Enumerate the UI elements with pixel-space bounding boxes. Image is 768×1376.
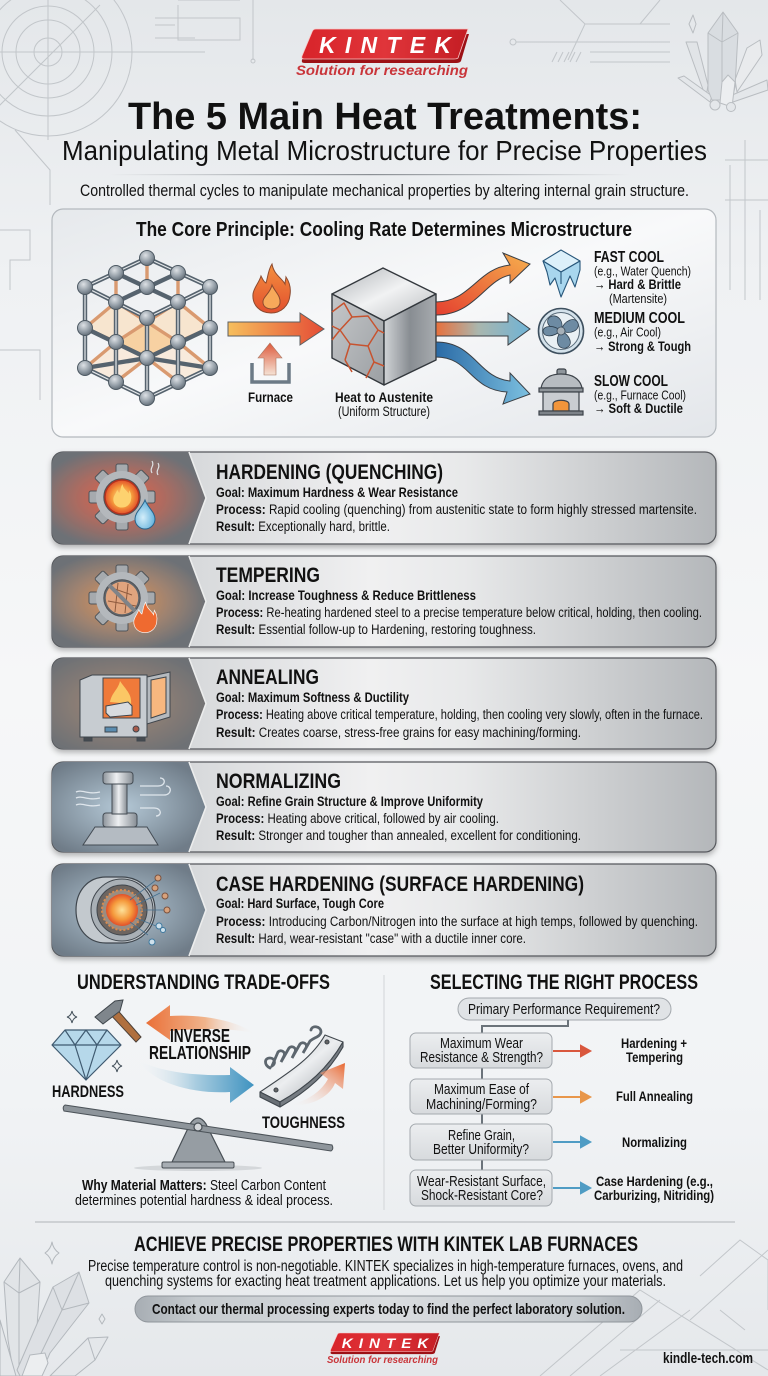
card text: Goal: Refine Grain Structure & Improve Uniformity [216, 794, 483, 809]
tagline: Controlled thermal cycles to manipulate mechanical properties by altering internal grain structure. [80, 182, 689, 200]
icon: gear with cracked grains and flame [89, 565, 157, 633]
card text: TEMPERING [216, 564, 320, 587]
section: selecting the right process [410, 971, 714, 1206]
panel: case hardening [52, 864, 716, 956]
icon: sparkles [67, 1011, 122, 1072]
label: fast cool: FAST COOL [594, 249, 664, 266]
arrow: orange inverse [146, 1005, 254, 1040]
card text: NORMALIZING [216, 770, 341, 793]
decoration: top right crystals [678, 12, 768, 112]
call to action pill: Contact our thermal processing experts today to find the perfect laboratory solution. [152, 1301, 625, 1318]
icon: spring [266, 1027, 321, 1068]
result 1: Hardening + [621, 1035, 687, 1051]
arrow: blue inverse [137, 1060, 254, 1103]
card text: Result: Hard, wear-resistant "case" with a ductile inner core. [216, 931, 526, 946]
arrow: decision 4 [553, 1183, 590, 1193]
logo tagline: Solution for researching [296, 63, 469, 78]
result 4: Case Hardening (e.g., [596, 1173, 713, 1189]
decision 1 [410, 1033, 552, 1068]
heading: trade-offs: UNDERSTANDING TRADE-OFFS [77, 971, 330, 994]
card text: Result: Essential follow-up to Hardening, restoring toughness. [216, 622, 536, 637]
icon: slow cool furnace [539, 369, 583, 415]
card text: Process: Heating above critical, followed by air cooling. [216, 811, 499, 826]
label: fast cool: → Hard & Brittle [594, 276, 681, 292]
label: fast cool [594, 249, 691, 306]
heated metal cube [332, 268, 436, 385]
icon: ice [543, 250, 580, 297]
card text [216, 873, 698, 946]
icon: diamond [52, 1030, 121, 1080]
decision 4: Shock-Resistant Core? [421, 1188, 543, 1204]
label: toughness: TOUGHNESS [262, 1114, 345, 1132]
decision 4: Wear-Resistant Surface, [417, 1174, 546, 1190]
result 1 [621, 1035, 687, 1065]
text: why material matters [75, 1178, 333, 1209]
label: medium cool [594, 310, 691, 354]
decision 3: Better Uniformity? [433, 1142, 529, 1158]
card text: Process: Introducing Carbon/Nitrogen into the surface at high temps, followed by quenching. [216, 914, 698, 929]
bottom logo tagline: Solution for researching [327, 1355, 438, 1366]
decision 4 [410, 1170, 552, 1206]
furnace label: Furnace [248, 389, 293, 405]
decision 2 [410, 1079, 552, 1114]
card text [216, 564, 702, 637]
icon: flame [253, 264, 290, 313]
flowchart start pill: Primary Performance Requirement? [468, 1002, 660, 1018]
arrow: decision 2 [553, 1092, 590, 1102]
card text: Result: Exceptionally hard, brittle. [216, 519, 390, 534]
card text [216, 770, 581, 843]
label: slow cool: SLOW COOL [594, 373, 668, 390]
result 4: Carburizing, Nitriding) [594, 1187, 714, 1203]
decision 2: Maximum Ease of [434, 1082, 530, 1098]
card text: Result: Creates coarse, stress-free grains for easy machining/forming. [216, 725, 581, 740]
label: heat to austenite: (Uniform Structure) [338, 404, 430, 419]
card text: Goal: Hard Surface, Tough Core [216, 896, 384, 911]
card text: HARDENING (QUENCHING) [216, 461, 443, 484]
arrow: orange rising [290, 1063, 345, 1105]
card text [216, 461, 697, 534]
card text: Goal: Increase Toughness & Reduce Brittleness [216, 588, 476, 603]
label: heat to austenite: Heat to Austenite [335, 389, 433, 405]
atom lattice diagram [78, 250, 218, 406]
label: medium cool: MEDIUM COOL [594, 310, 685, 327]
result 4 [594, 1173, 714, 1203]
logo wordmark: KINTEK [319, 32, 452, 58]
panel: tempering [52, 556, 716, 647]
icon: hammer [95, 1000, 141, 1042]
icon: column with air flow [76, 772, 170, 845]
card text [216, 666, 703, 740]
panel: core principle [52, 209, 716, 437]
icon: furnace tray [252, 343, 289, 382]
footer heading: ACHIEVE PRECISE PROPERTIES WITH KINTEK LAB FURNACES [134, 1233, 638, 1256]
title: The 5 Main Heat Treatments: [128, 96, 642, 138]
label: medium cool: (e.g., Air Cool) [594, 324, 661, 340]
card text: Goal: Maximum Hardness & Wear Resistance [216, 485, 458, 500]
arrow: slow cooling [436, 342, 530, 404]
panel: normalizing [52, 762, 716, 852]
decision 3: Refine Grain, [448, 1128, 515, 1144]
subtitle: Manipulating Metal Microstructure for Precise Properties [62, 135, 707, 166]
section: trade-offs [52, 971, 345, 1209]
icon: case hardened cylinder [76, 875, 170, 945]
label: medium cool: → Strong & Tough [594, 338, 691, 354]
icon: fan [538, 308, 584, 354]
result 2: Full Annealing [616, 1088, 693, 1104]
label: fast cool: (e.g., Water Quench) [594, 264, 691, 278]
decision 1: Maximum Wear [440, 1036, 523, 1052]
footer body text [88, 1258, 683, 1290]
heading: selecting process: SELECTING THE RIGHT PROCESS [430, 971, 698, 994]
logo: Kintek top [302, 29, 469, 63]
decision 3 [410, 1124, 552, 1160]
panel: hardening [52, 452, 716, 544]
call to action pill [135, 1296, 642, 1322]
arrow: fast cooling [436, 253, 530, 315]
icon: gear with flame and droplet [89, 461, 159, 530]
decision 2: Machining/Forming? [426, 1097, 537, 1113]
label: hardness: HARDNESS [52, 1083, 124, 1101]
card text: Process: Rapid cooling (quenching) from austenitic state to form highly stressed martensite. [216, 502, 697, 517]
label: heat to austenite [335, 389, 433, 419]
card text: ANNEALING [216, 666, 319, 689]
icon: bent steel bar [260, 1035, 343, 1107]
text: why material matters: Why Material Matters: Steel Carbon Content [82, 1178, 326, 1194]
result 1: Tempering [626, 1049, 683, 1065]
text: why material matters: determines potential hardness & ideal process. [75, 1193, 333, 1209]
label: fast cool: (Martensite) [609, 291, 667, 306]
card text: CASE HARDENING (SURFACE HARDENING) [216, 873, 584, 896]
decision 1: Resistance & Strength? [420, 1050, 543, 1066]
arrow: heating [228, 313, 324, 345]
arrow: medium cooling [436, 313, 530, 345]
icon: open furnace [80, 672, 170, 741]
label: slow cool: → Soft & Ductile [594, 400, 683, 416]
logo: Kintek bottom [330, 1333, 440, 1354]
logo wordmark bottom: KINTEK [342, 1336, 430, 1352]
result 3: Normalizing [622, 1134, 687, 1150]
label: slow cool [594, 373, 686, 416]
flowchart start pill [458, 998, 671, 1020]
arrow: decision 3 [553, 1137, 590, 1147]
arrow: decision 1 [553, 1046, 590, 1056]
panel heading: The Core Principle: Cooling Rate Determines Microstructure [136, 218, 632, 241]
label: slow cool: (e.g., Furnace Cool) [594, 388, 686, 402]
label: inverse relationship: INVERSE [170, 1026, 230, 1046]
label: inverse relationship [149, 1026, 251, 1063]
label: inverse relationship: RELATIONSHIP [149, 1043, 251, 1063]
card text: Goal: Maximum Softness & Ductility [216, 690, 409, 705]
seesaw [63, 1105, 333, 1171]
panel: annealing [52, 658, 716, 749]
card text: Result: Stronger and tougher than annealed, excellent for conditioning. [216, 828, 581, 843]
decoration: bottom left crystals [0, 1242, 108, 1376]
